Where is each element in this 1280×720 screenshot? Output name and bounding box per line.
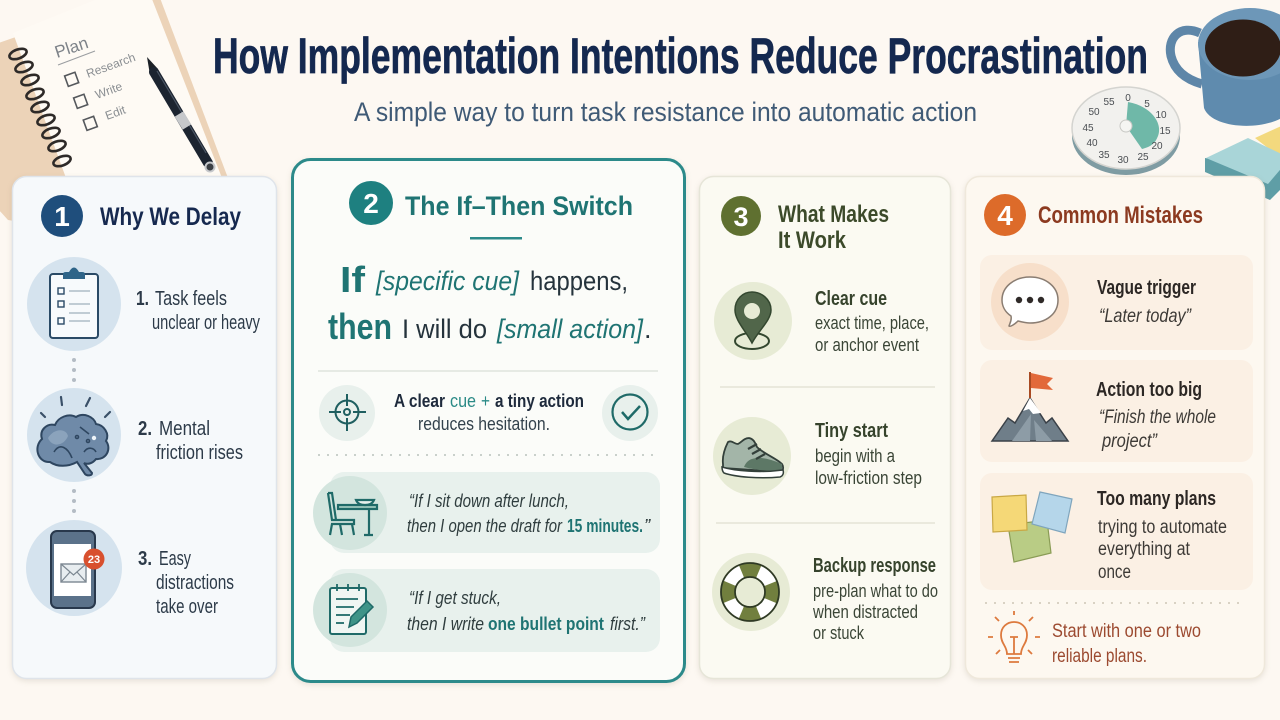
icon: light bulb bbox=[988, 611, 1040, 662]
key message: cue bbox=[450, 390, 476, 411]
tip text: reliable plans. bbox=[1052, 646, 1147, 667]
illustration: timer: 35 bbox=[1098, 150, 1110, 161]
panel: common mistakes bbox=[966, 176, 1264, 678]
key message: reduces hesitation. bbox=[418, 413, 550, 434]
formula: then line: . bbox=[644, 314, 652, 344]
illustration: timer: 40 bbox=[1086, 138, 1098, 149]
item 2 text bbox=[138, 418, 243, 464]
number badge 3 bbox=[721, 196, 761, 236]
panel: why we delay bbox=[12, 176, 276, 678]
heading: the if-then switch: The If–Then Switch bbox=[405, 191, 633, 221]
icon: speech bubble bbox=[1002, 277, 1058, 326]
item 1 text: unclear or heavy bbox=[152, 312, 260, 334]
vague trigger text: Vague trigger bbox=[1097, 277, 1196, 299]
number badge 1: 1 bbox=[54, 201, 70, 232]
panel: what makes it work bbox=[700, 176, 950, 678]
item 1 text bbox=[136, 288, 260, 334]
number badge 4 bbox=[984, 194, 1026, 236]
tiny start text bbox=[815, 420, 922, 488]
illustration: timer: 55 bbox=[1103, 97, 1115, 108]
illustration: timer bbox=[1072, 87, 1180, 175]
backup response text: Backup response bbox=[813, 555, 936, 577]
item 3 text: Easy bbox=[159, 548, 191, 570]
key message: A clear bbox=[394, 390, 445, 411]
vague trigger text: “Later today” bbox=[1099, 306, 1192, 327]
number badge 4: 4 bbox=[997, 200, 1013, 231]
formula: if line: happens, bbox=[530, 266, 628, 296]
illustration: timer: 50 bbox=[1088, 107, 1100, 118]
action too big text bbox=[1096, 379, 1216, 452]
illustration: timer: 10 bbox=[1155, 110, 1167, 121]
icon: mountain with flag bbox=[992, 372, 1068, 441]
item 2 text: friction rises bbox=[156, 442, 243, 464]
too many plans text: trying to automate bbox=[1098, 517, 1227, 538]
icon: sticky notes bbox=[992, 492, 1072, 562]
formula: if line: If bbox=[340, 259, 366, 300]
formula: then line: I will do bbox=[402, 314, 487, 344]
example 2 quote: one bullet point bbox=[488, 613, 604, 634]
icon: chair and table bbox=[328, 493, 377, 535]
illustration: timer: 15 bbox=[1159, 126, 1171, 137]
number badge 2: 2 bbox=[363, 188, 379, 219]
tiny start text: Tiny start bbox=[815, 420, 888, 442]
icon: life ring bbox=[712, 553, 790, 631]
formula: then line: [small action] bbox=[496, 314, 644, 344]
icon: notepad and pencil bbox=[330, 584, 373, 634]
heading: common mistakes: Common Mistakes bbox=[1038, 202, 1203, 229]
vague trigger text bbox=[1097, 277, 1196, 327]
icon: phone with notification bbox=[26, 520, 122, 616]
illustration: timer: 0 bbox=[1125, 93, 1131, 104]
tip text bbox=[1052, 621, 1201, 667]
illustration: coffee mug bbox=[1170, 8, 1280, 126]
example 1 quote: ” bbox=[644, 515, 651, 536]
item 3 text: take over bbox=[156, 596, 218, 618]
icon: target bbox=[319, 385, 375, 441]
example 1 quote: then I open the draft for bbox=[407, 515, 563, 536]
key message: + bbox=[481, 390, 490, 411]
illustration: notebook and pen: Edit bbox=[103, 102, 128, 123]
item 1 text: Task feels bbox=[155, 288, 227, 310]
formula: then line: then bbox=[328, 306, 392, 347]
icon: check mark bbox=[602, 385, 658, 441]
example 2 quote: first.” bbox=[610, 613, 646, 634]
number badge 1 bbox=[41, 195, 83, 237]
illustration: sticky notes bbox=[1205, 122, 1280, 200]
item 1 text: 1. bbox=[136, 288, 149, 310]
illustration: timer: 5 bbox=[1144, 99, 1150, 110]
tiny start text: begin with a bbox=[815, 445, 896, 466]
too many plans text: once bbox=[1098, 562, 1131, 583]
icon: location pin bbox=[714, 282, 792, 360]
item 3 text: distractions bbox=[156, 572, 234, 594]
too many plans text bbox=[1097, 488, 1227, 583]
clear cue text: or anchor event bbox=[815, 334, 919, 355]
key message: a tiny action bbox=[495, 390, 584, 411]
item 3 text bbox=[138, 548, 234, 618]
heading: why we delay: Why We Delay bbox=[100, 203, 241, 231]
backup response text: when distracted bbox=[812, 601, 918, 622]
heading: what makes it work: It Work bbox=[778, 227, 847, 254]
tip text: Start with one or two bbox=[1052, 621, 1201, 642]
illustration: timer: 20 bbox=[1151, 141, 1163, 152]
number badge 2 bbox=[349, 181, 393, 225]
example 1 quote: 15 minutes. bbox=[567, 515, 643, 536]
mistake: too many plans bbox=[980, 473, 1253, 590]
icon: phone with notification: 23 bbox=[88, 554, 100, 566]
panel: the if-then switch bbox=[292, 160, 684, 682]
action too big text: project” bbox=[1101, 431, 1158, 452]
too many plans text: everything at bbox=[1098, 539, 1191, 560]
example 1 quote: “If I sit down after lunch, bbox=[409, 490, 569, 511]
heading: what makes it work bbox=[778, 201, 889, 254]
illustration: timer: 30 bbox=[1117, 155, 1129, 166]
item 2 text: Mental bbox=[159, 418, 210, 440]
mistake: vague trigger bbox=[980, 255, 1253, 350]
backup response text: pre-plan what to do bbox=[813, 580, 938, 601]
illustration: notebook and pen: Plan bbox=[52, 33, 91, 62]
backup response text: or stuck bbox=[813, 622, 865, 643]
clear cue text: exact time, place, bbox=[815, 312, 929, 333]
number badge 3: 3 bbox=[733, 202, 749, 232]
backup response text bbox=[812, 555, 938, 643]
example 2 quote: then I write bbox=[407, 613, 484, 634]
formula: if line: [specific cue] bbox=[375, 266, 520, 296]
illustration: notebook and pen: Research bbox=[84, 50, 137, 81]
example 1 quote bbox=[407, 490, 651, 536]
heading: what makes it work: What Makes bbox=[778, 201, 889, 228]
subtitle: A simple way to turn task resistance into automatic action bbox=[354, 97, 977, 127]
illustration: notebook and pen bbox=[0, 0, 228, 222]
icon: sneaker bbox=[713, 417, 791, 495]
clear cue text: Clear cue bbox=[815, 288, 887, 310]
too many plans text: Too many plans bbox=[1097, 488, 1216, 510]
action too big text: Action too big bbox=[1096, 379, 1202, 401]
icon: stressed brain bbox=[27, 388, 121, 482]
formula: if line bbox=[340, 259, 628, 300]
icon: clipboard bbox=[27, 257, 121, 351]
example 2 quote: “If I get stuck, bbox=[409, 587, 501, 608]
example 2 quote bbox=[407, 587, 646, 634]
key message bbox=[394, 390, 584, 434]
formula: then line bbox=[328, 306, 652, 347]
example 2 bbox=[313, 569, 660, 652]
illustration: notebook and pen: Write bbox=[93, 79, 124, 102]
clear cue text bbox=[815, 288, 929, 355]
tiny start text: low-friction step bbox=[815, 467, 922, 488]
item 3 text: 3. bbox=[138, 548, 152, 570]
item 2 text: 2. bbox=[138, 418, 152, 440]
mistake: action too big bbox=[980, 360, 1253, 462]
illustration: timer: 45 bbox=[1082, 123, 1094, 134]
action too big text: “Finish the whole bbox=[1099, 407, 1216, 428]
example 1 bbox=[313, 472, 660, 553]
illustration: timer: 25 bbox=[1137, 152, 1149, 163]
